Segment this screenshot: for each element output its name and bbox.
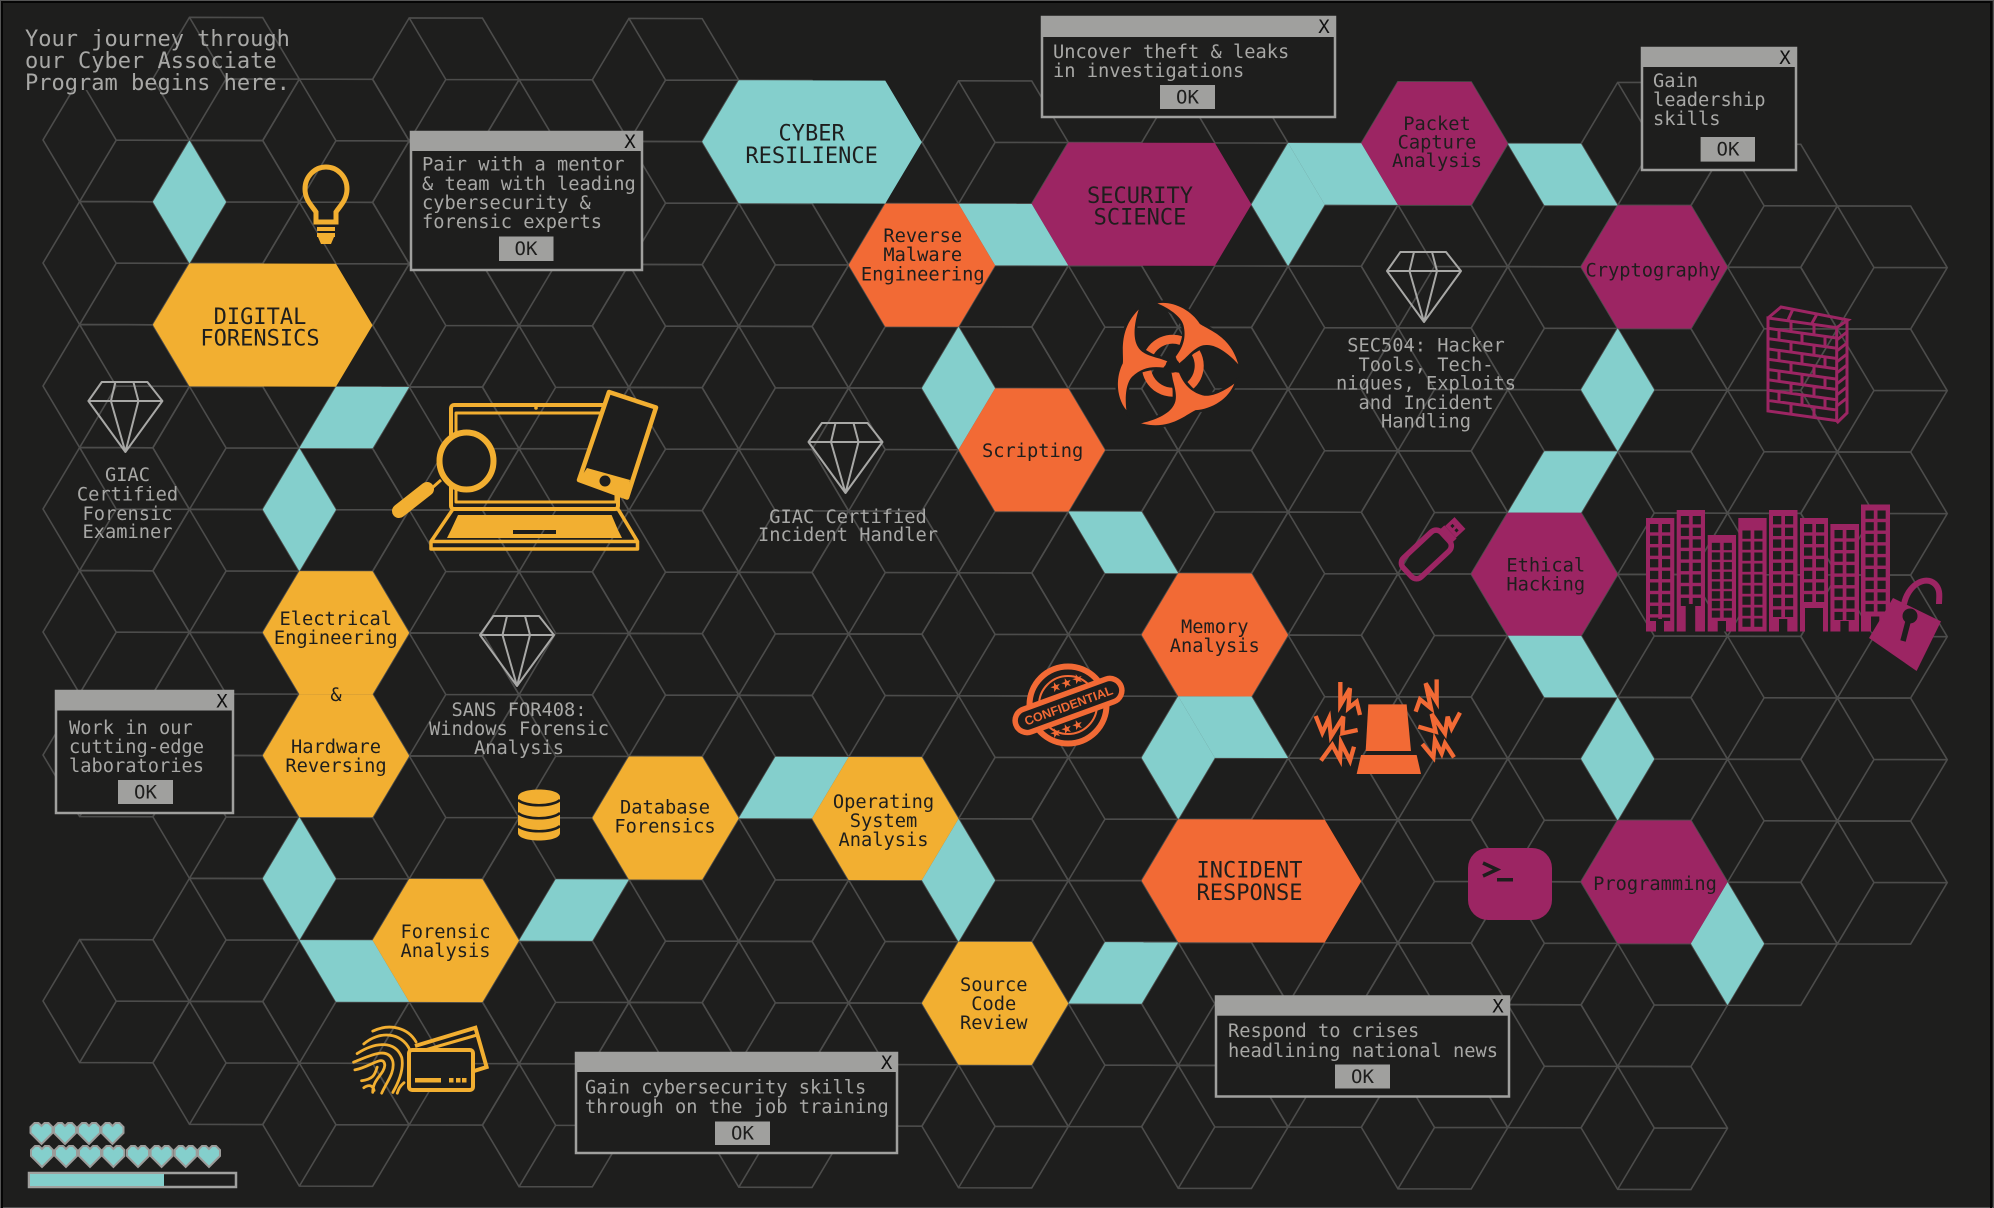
hex: Incident Response: RESPONSE [1197,881,1302,906]
hex: Source Code Review: Review [960,1013,1028,1034]
heading: intro text: Your journey through [25,27,290,52]
popup: laboratories [55,690,234,813]
certification: SEC504: and Incident [1358,393,1494,414]
popup: mentor: forensic experts [422,212,602,233]
certification: GIAC Certified Forensic Examiner: Examiner [82,522,173,543]
popup: uncover theft: in investigations [1053,61,1244,82]
hex: Incident Response: INCIDENT [1197,859,1302,884]
hex: Incident Response [1142,819,1361,943]
certification: GIAC Certified Forensic Examiner: GIAC [105,465,150,486]
hex: Packet Capture Analysis: Packet [1403,114,1471,135]
icon: fingerprint and credit cards [354,1027,487,1093]
hex: Security Science: SCIENCE [1094,206,1186,231]
icon: laptop, magnifier and phone [399,392,656,549]
hex: Operating System Analysis [812,757,958,880]
popup: on the job training [575,1052,898,1153]
certification: SEC504 [1336,252,1516,432]
hex: Cyber Resilience [702,80,922,204]
popup: on the job training: X [881,1052,893,1074]
hex: Digital Forensics: FORENSICS [200,327,320,352]
hex: Source Code Review: Code [971,994,1016,1015]
hex: Reverse Malware Engineering: Reverse [883,226,962,247]
icon: USB stick [1398,514,1469,582]
popup: leadership: Gain [1653,71,1698,92]
hex: Forensic Analysis [373,879,519,1002]
hex: Security Science [1032,142,1251,266]
hex: Security Science: SECURITY [1087,184,1193,209]
hex: Source Code Review [922,942,1068,1065]
icon: confidential stamp: ★★★ [1048,671,1086,697]
popup: crises: X [1492,996,1504,1018]
hex: Database Forensics: Database [620,798,710,819]
popup: laboratories: cutting-edge [69,737,204,758]
certification: GIAC Certified Forensic Examiner [77,382,178,543]
popup: crises: Respond to crises [1228,1021,1419,1042]
hex: Electrical Engineering and Hardware Reversing: Reversing [285,756,387,777]
certification: GIAC Certified Incident Handler: Incident Handler [758,525,938,546]
popup: leadership: OK [1717,138,1740,160]
popup: crises: headlining national news [1228,1041,1498,1062]
certification: SANS FOR408: Windows Forensic [429,719,609,740]
hex: Operating System Analysis: Operating [833,792,934,813]
hearts: lives [30,1123,220,1167]
hex: Operating System Analysis: System [850,811,917,832]
popup: leadership: skills [1653,109,1721,130]
certification: SANS FOR408: SANS FOR408: [451,700,587,721]
hex: Reverse Malware Engineering: Engineering [861,265,985,286]
icon: flashing siren [1316,679,1460,774]
popup: mentor [410,131,643,270]
popup: uncover theft: Uncover theft & leaks [1053,42,1289,63]
popup: uncover theft: X [1318,16,1330,38]
hex: Packet Capture Analysis [1361,82,1508,205]
icon: open padlock [1869,581,1941,671]
popup: on the job training: OK [731,1122,754,1144]
popup: leadership: X [1779,47,1791,69]
hex: Database Forensics [592,756,739,880]
teal path connectors [153,140,1764,1005]
certification: GIAC Certified Forensic Examiner: Certified [77,485,178,506]
hex: Digital Forensics [153,263,373,387]
popup: laboratories: Work in our [69,718,193,739]
icon: confidential stamp: ★★★ [1048,717,1086,743]
popup: mentor: OK [515,238,538,260]
heading: intro text: Program begins here. [25,71,290,96]
popup: uncover theft: OK [1176,86,1199,108]
certification: GIAC Certified Forensic Examiner: Forensic [82,504,173,525]
hex: Database Forensics: Forensics [614,817,716,838]
popup: laboratories: laboratories [69,756,204,777]
popup: crises: OK [1351,1066,1374,1088]
hex: Packet Capture Analysis: Analysis [1392,151,1482,172]
icon: confidential stamp: CONFIDENTIAL [1023,683,1115,728]
hex: Programming [1581,820,1728,944]
icon: city buildings [1646,504,1890,632]
hex: Ethical Hacking: Hacking [1506,574,1585,595]
hex: Ethical Hacking [1471,513,1618,636]
certification: GIAC Certified Incident Handler [758,423,938,546]
hex: Scripting [958,388,1105,512]
icon: confidential stamp [1012,666,1125,744]
certification: GIAC Certified Incident Handler: GIAC Certified [769,507,927,528]
hex: Reverse Malware Engineering: Malware [883,245,962,266]
icon: database [518,790,560,840]
hex: Memory Analysis: Memory [1181,617,1248,638]
certification: SANS FOR408: Analysis [474,738,564,759]
popup: on the job training: through on the job training [585,1097,889,1118]
popup: mentor: & team with leading [422,174,636,195]
certification: SEC504: Handling [1381,411,1471,432]
hex: Cryptography [1581,205,1728,329]
hex: Source Code Review: Source [960,975,1028,996]
icon: biohazard [1085,303,1238,454]
popup: crises [1215,996,1510,1096]
hex: Cyber Resilience: RESILIENCE [745,144,878,169]
hex: Programming: Programming [1593,874,1717,895]
hex: Scripting: Scripting [982,441,1083,462]
hex: Electrical Engineering and Hardware Reversing: Hardware [291,737,381,758]
hex: Memory Analysis: Analysis [1170,636,1260,657]
hex: Packet Capture Analysis: Capture [1398,133,1476,154]
popup: mentor: X [624,131,636,153]
popup: laboratories: OK [134,782,157,804]
hex: Cyber Resilience: CYBER [778,122,845,147]
hex: Digital Forensics: DIGITAL [214,305,306,330]
icon: terminal prompt [1468,848,1552,920]
hex: Electrical Engineering and Hardware Reversing [263,571,409,817]
hex: Electrical Engineering and Hardware Reversing: Engineering [274,628,398,649]
certification: SEC504: niques, Exploits [1336,374,1516,395]
popup: leadership: leadership [1653,90,1766,111]
certification: SANS FOR408 [429,616,609,759]
hex: Reverse Malware Engineering [849,203,995,327]
popup: mentor: Pair with a mentor [422,155,625,176]
popup: leadership [1641,47,1797,170]
certification: SEC504: SEC504: Hacker [1347,336,1505,357]
progress bar [29,1173,236,1187]
popup: mentor: cybersecurity & [422,193,592,214]
certification: SEC504: Tools, Tech- [1358,355,1494,376]
hex: Forensic Analysis: Analysis [400,941,491,962]
icon: firewall brick wall [1768,307,1848,423]
hex: Ethical Hacking: Ethical [1506,556,1585,577]
hex: Cryptography: Cryptography [1585,261,1721,282]
hex: Forensic Analysis: Forensic [400,922,491,943]
popup: laboratories: X [216,690,228,712]
icon: lightbulb [305,167,347,244]
heading: intro text: our Cyber Associate [25,49,277,74]
popup: on the job training: Gain cybersecurity skills [585,1078,866,1099]
popup: uncover theft [1041,16,1336,117]
hex: Electrical Engineering and Hardware Reversing: & [330,685,342,706]
hex: Electrical Engineering and Hardware Reversing: Electrical [279,609,392,630]
hex: Memory Analysis [1142,573,1288,697]
hex: Operating System Analysis: Analysis [838,830,929,851]
